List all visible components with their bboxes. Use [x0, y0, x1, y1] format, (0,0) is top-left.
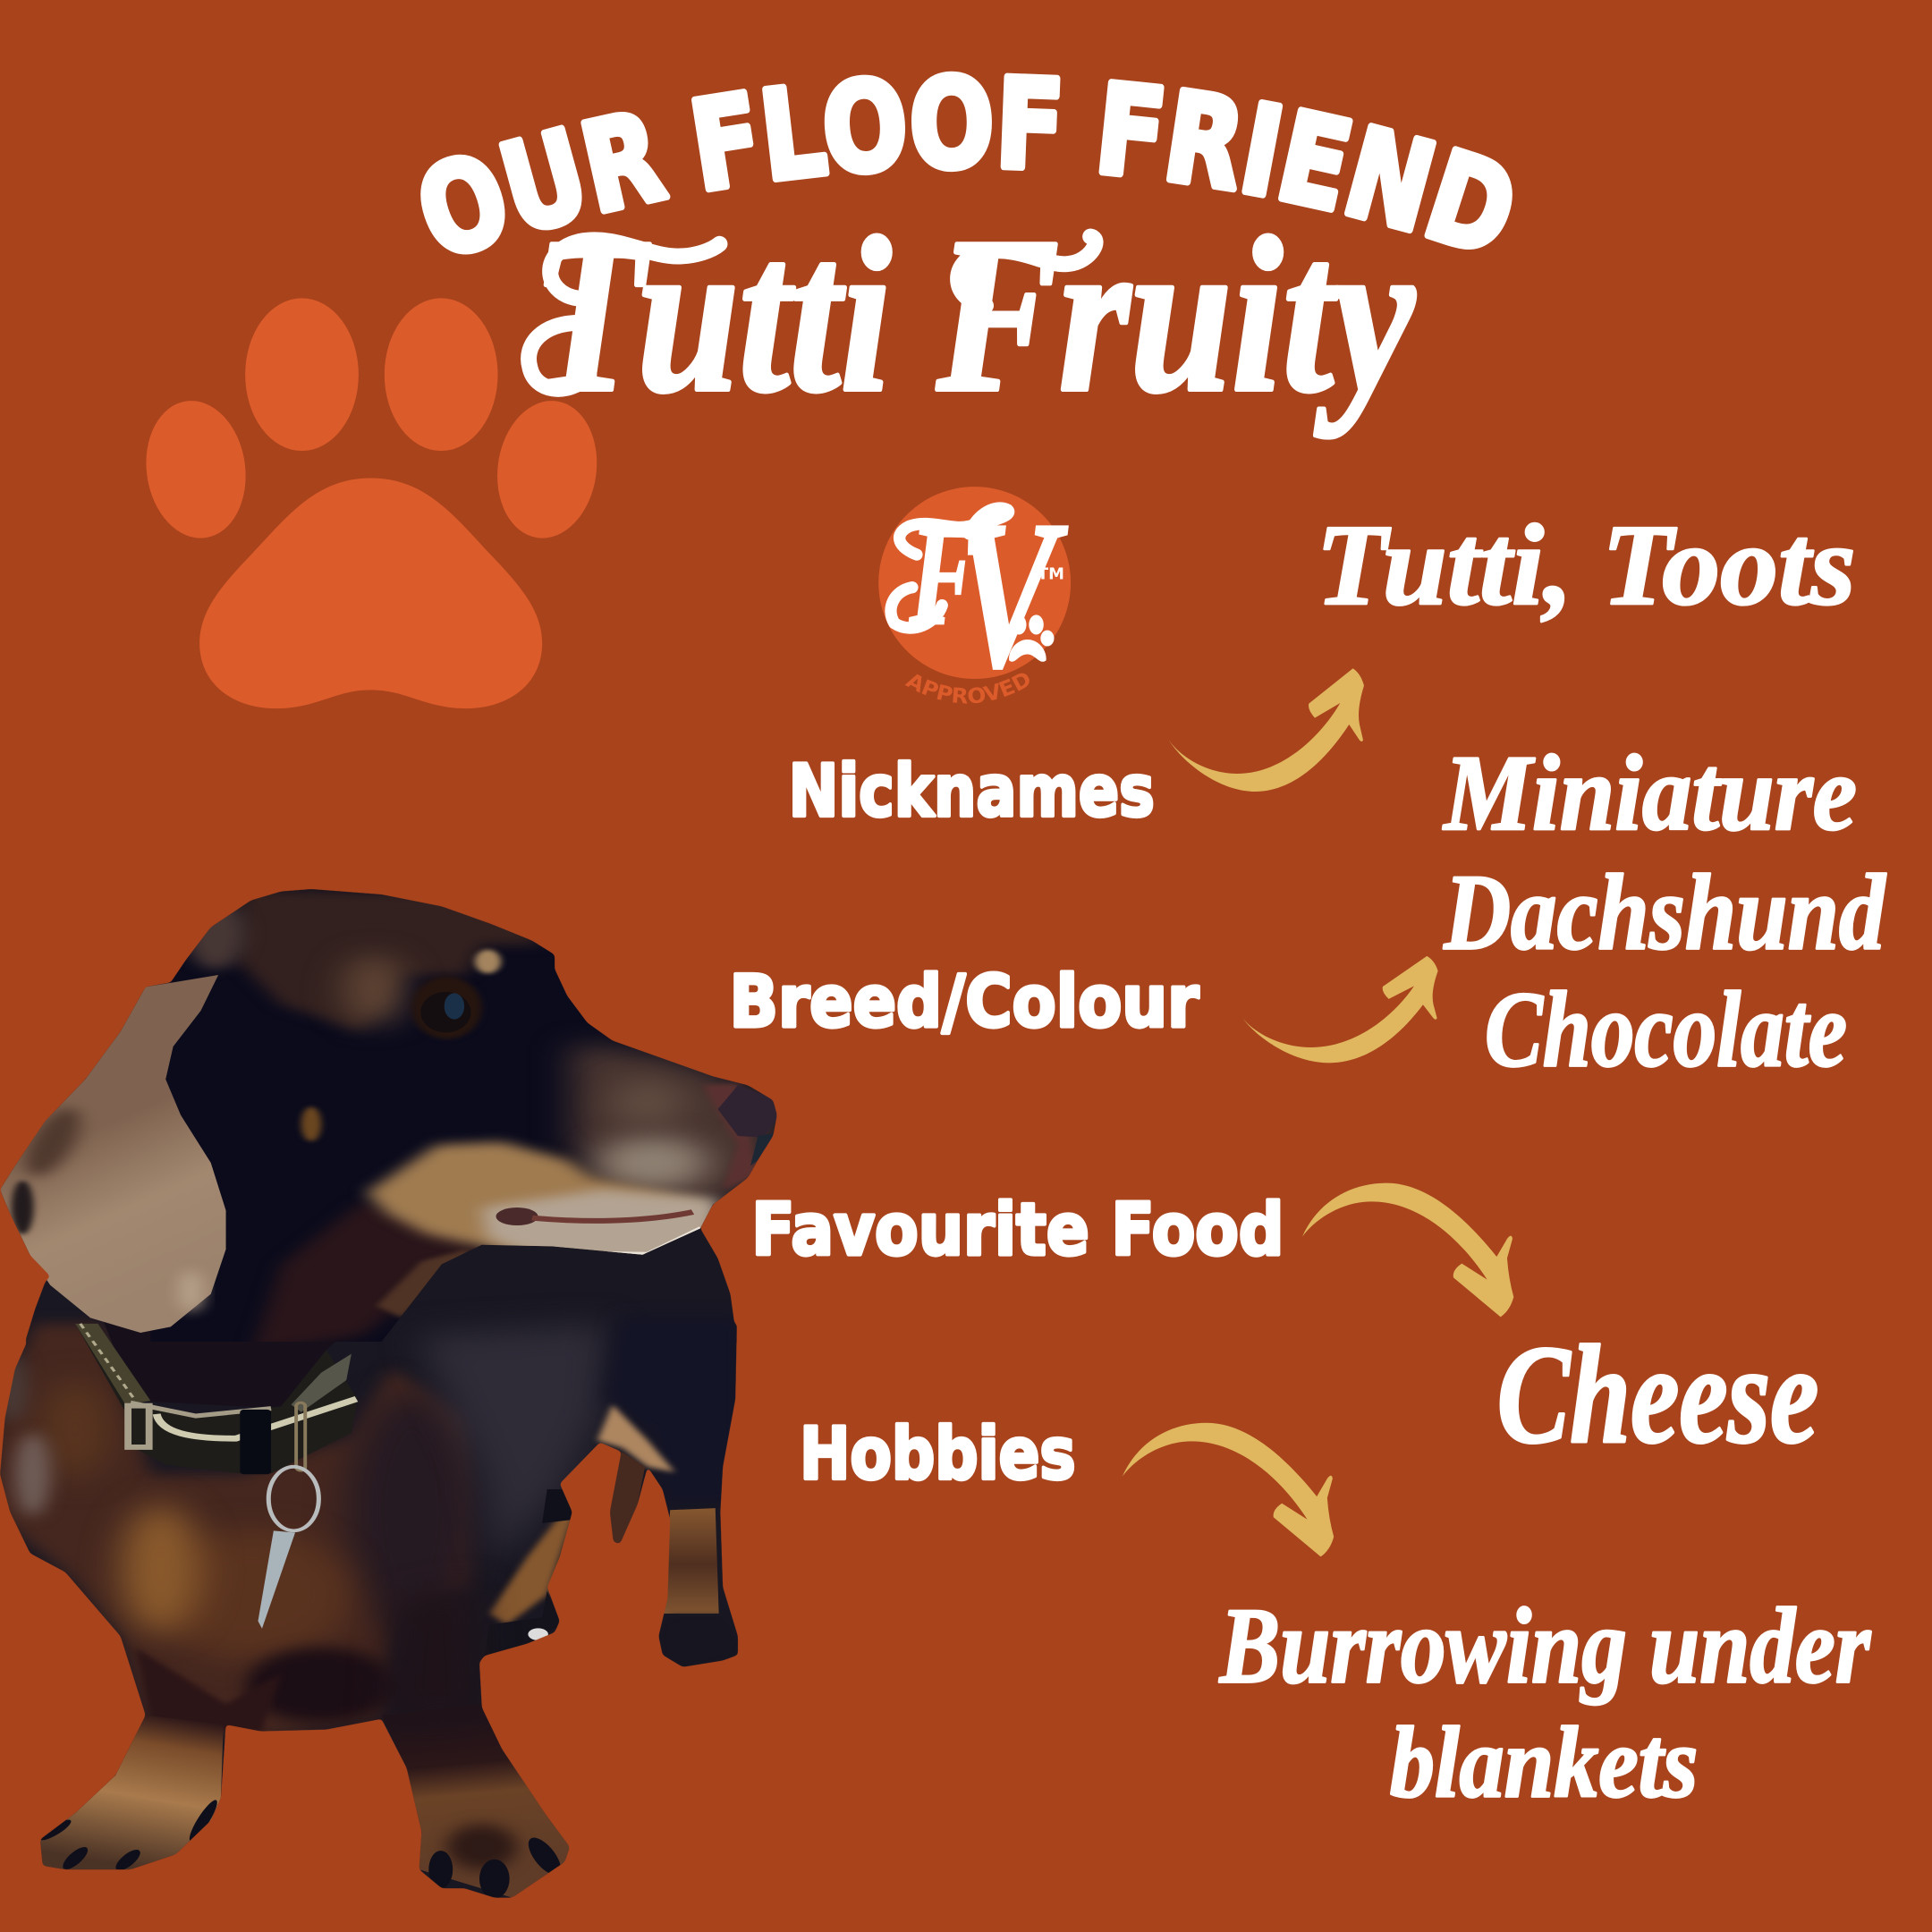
logo approved text: APPROVED — [905, 673, 1030, 704]
label: Favourite Food: Favourite Food — [751, 1188, 1284, 1271]
logo: FV approved — [878, 478, 1072, 712]
dog eye — [411, 977, 482, 1039]
title swashes — [529, 236, 1096, 389]
dog near rear leg — [663, 1508, 719, 1614]
dog head — [0, 877, 793, 1353]
arrow: breed to Miniature Dachshund Chocolate — [1242, 956, 1438, 1063]
text: blankets: blankets — [1390, 1707, 1698, 1818]
arrow: favourite food to Cheese — [1302, 1183, 1513, 1317]
arrow: hobbies to burrowing — [1123, 1423, 1334, 1556]
text: Chocolate: Chocolate — [1485, 970, 1847, 1090]
dog neck — [251, 1201, 482, 1353]
label: Nicknames: Nicknames — [789, 750, 1155, 833]
dog chest — [0, 1324, 467, 1738]
dog tan cheek — [367, 1142, 708, 1264]
label: Hobbies: Hobbies — [800, 1412, 1076, 1496]
dog front left claws — [41, 1800, 217, 1869]
label: Breed/Colour: Breed/Colour — [730, 961, 1199, 1044]
dog collar — [75, 1324, 358, 1629]
dog neck shadow above collar — [104, 1322, 333, 1407]
text: Miniature: Miniature — [1443, 733, 1857, 853]
logo mini paw — [1001, 614, 1054, 662]
dog far rear leg — [487, 1520, 571, 1623]
dog base — [0, 862, 813, 1922]
dog muzzle top — [572, 1044, 783, 1210]
dog forehead — [236, 888, 542, 1031]
icon: paw print — [138, 298, 606, 708]
logo trademark: TM — [1038, 564, 1064, 583]
dog skull dark mask — [150, 943, 634, 1342]
logo flourishes — [891, 508, 1009, 628]
title text: Tutti Fruity — [532, 191, 1415, 437]
dog front leg left — [40, 1716, 224, 1869]
text: Cheese: Cheese — [1497, 1317, 1818, 1472]
dog front right claws — [428, 1837, 560, 1898]
arrow: nicknames to Tutti, Toots — [1169, 668, 1364, 792]
dog mouth — [496, 1208, 692, 1225]
dog nose — [703, 1084, 778, 1190]
dog head clipped shading — [140, 877, 793, 1353]
dog belly stripe — [597, 1404, 675, 1472]
dog ear — [0, 975, 226, 1333]
dog tail area — [610, 1452, 645, 1544]
title: our floof friend: OUR FLOOF FRIEND — [420, 72, 1513, 254]
dog collar ring and tag — [258, 1402, 318, 1629]
photo illustration: dachshund — [0, 862, 813, 1922]
dog front leg right — [390, 1724, 569, 1898]
logo letter F: F — [909, 495, 979, 656]
dog body — [0, 1301, 743, 1899]
title: Tutti Fruity — [529, 191, 1415, 437]
dog flank — [422, 1322, 606, 1546]
logo letter V: V — [953, 478, 1068, 712]
text: Tutti, Toots: Tutti, Toots — [1316, 502, 1856, 630]
